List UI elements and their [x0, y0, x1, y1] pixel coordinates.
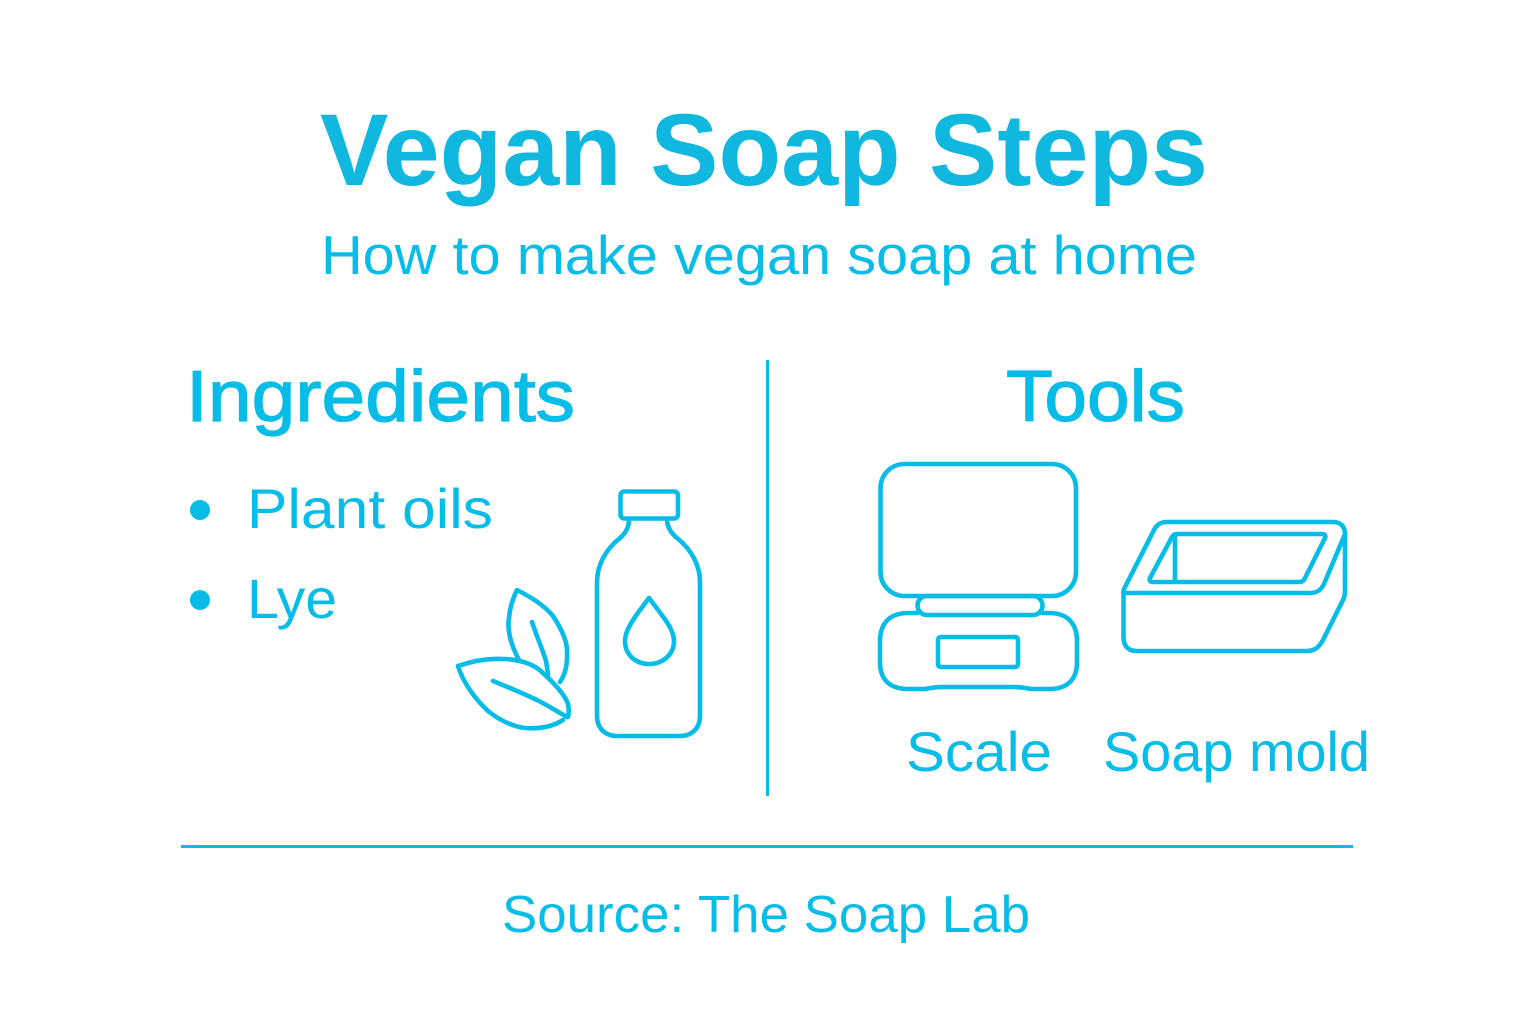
subtitle: How to make vegan soap at home — [321, 224, 1197, 286]
heading: ingredients: Ingredients — [186, 357, 575, 437]
panel: tools — [880, 357, 1370, 783]
icon: leaves — [458, 590, 569, 728]
heading: tools: Tools — [1006, 357, 1185, 437]
icon: soap mold — [1124, 522, 1345, 651]
icon: scale — [880, 464, 1077, 689]
panel: ingredients — [186, 357, 700, 736]
title: Vegan Soap Steps — [320, 93, 1208, 207]
list item: plant oils: Plant oils — [247, 477, 493, 540]
source note: Source: The Soap Lab — [502, 886, 1030, 944]
list item: lye — [190, 567, 337, 630]
vertical divider — [766, 360, 769, 796]
list item: lye: Lye — [247, 567, 337, 630]
label: scale: Scale — [906, 720, 1052, 783]
label: soap mold: Soap mold — [1103, 720, 1370, 783]
bullet list — [190, 477, 493, 630]
icon: bottle with drop — [597, 492, 700, 736]
footer rule — [181, 845, 1353, 848]
